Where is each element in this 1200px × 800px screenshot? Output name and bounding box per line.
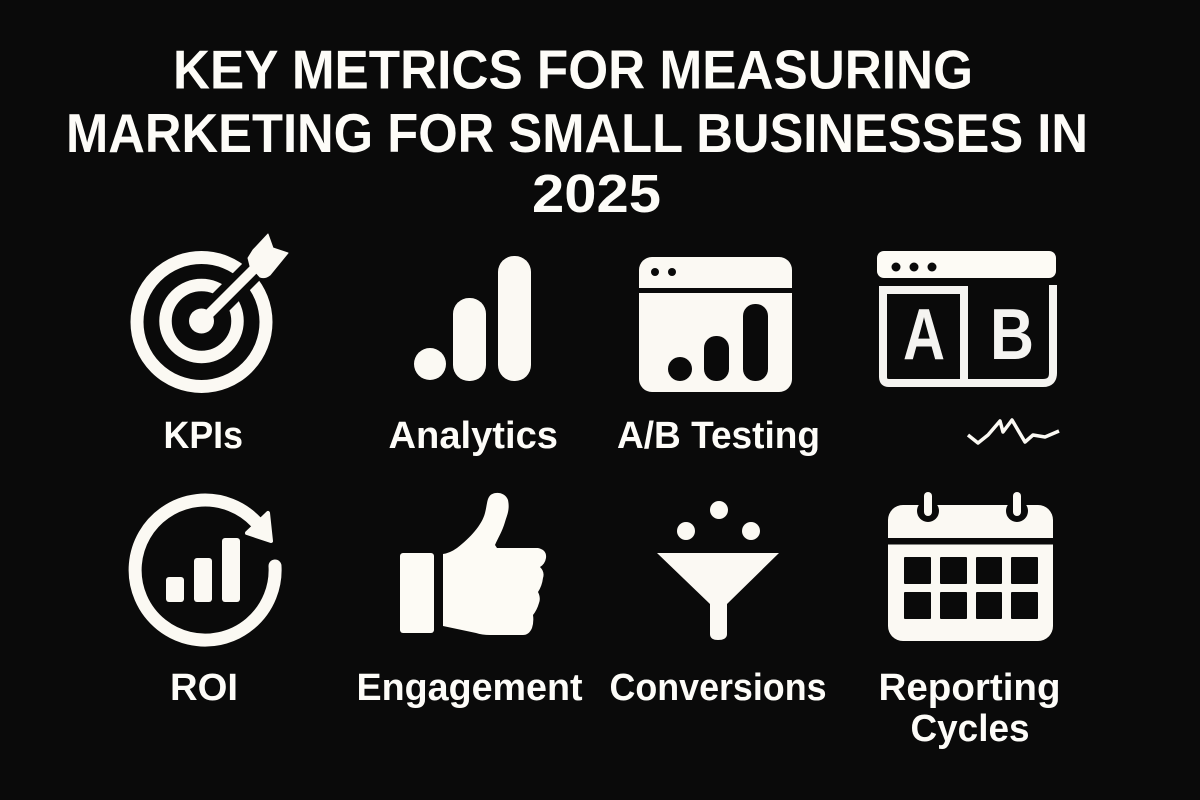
title [66, 38, 1088, 224]
label: Reporting Cycles [878, 667, 1060, 750]
icon: browser with chart [639, 257, 792, 392]
icon: ROI cycle [135, 500, 275, 640]
label: Reporting Cycles: Reporting [878, 667, 1060, 709]
label: A/B Testing: A/B Testing [617, 415, 820, 457]
label: Engagement: Engagement [356, 667, 583, 709]
title: 2025 [532, 164, 661, 224]
icon: calendar [888, 492, 1053, 641]
label: Conversions: Conversions [610, 667, 826, 709]
icon: funnel with dots [657, 501, 779, 640]
label: KPIs: KPIs [164, 415, 243, 457]
icon: A/B test window [877, 251, 1056, 383]
icon: analytics bars [414, 256, 531, 381]
label: Analytics: Analytics [388, 415, 558, 457]
label: Reporting Cycles: Cycles [910, 708, 1030, 750]
icon: A/B test window: A [903, 295, 945, 375]
icon: thumbs up [400, 493, 546, 635]
icon: A/B test window: B [990, 295, 1034, 375]
icon: target with arrow [137, 234, 288, 386]
label: ROI: ROI [170, 667, 238, 709]
title: MARKETING FOR SMALL BUSINESSES IN [66, 102, 1088, 164]
title: KEY METRICS FOR MEASURING [173, 38, 973, 100]
squiggle [968, 420, 1059, 443]
